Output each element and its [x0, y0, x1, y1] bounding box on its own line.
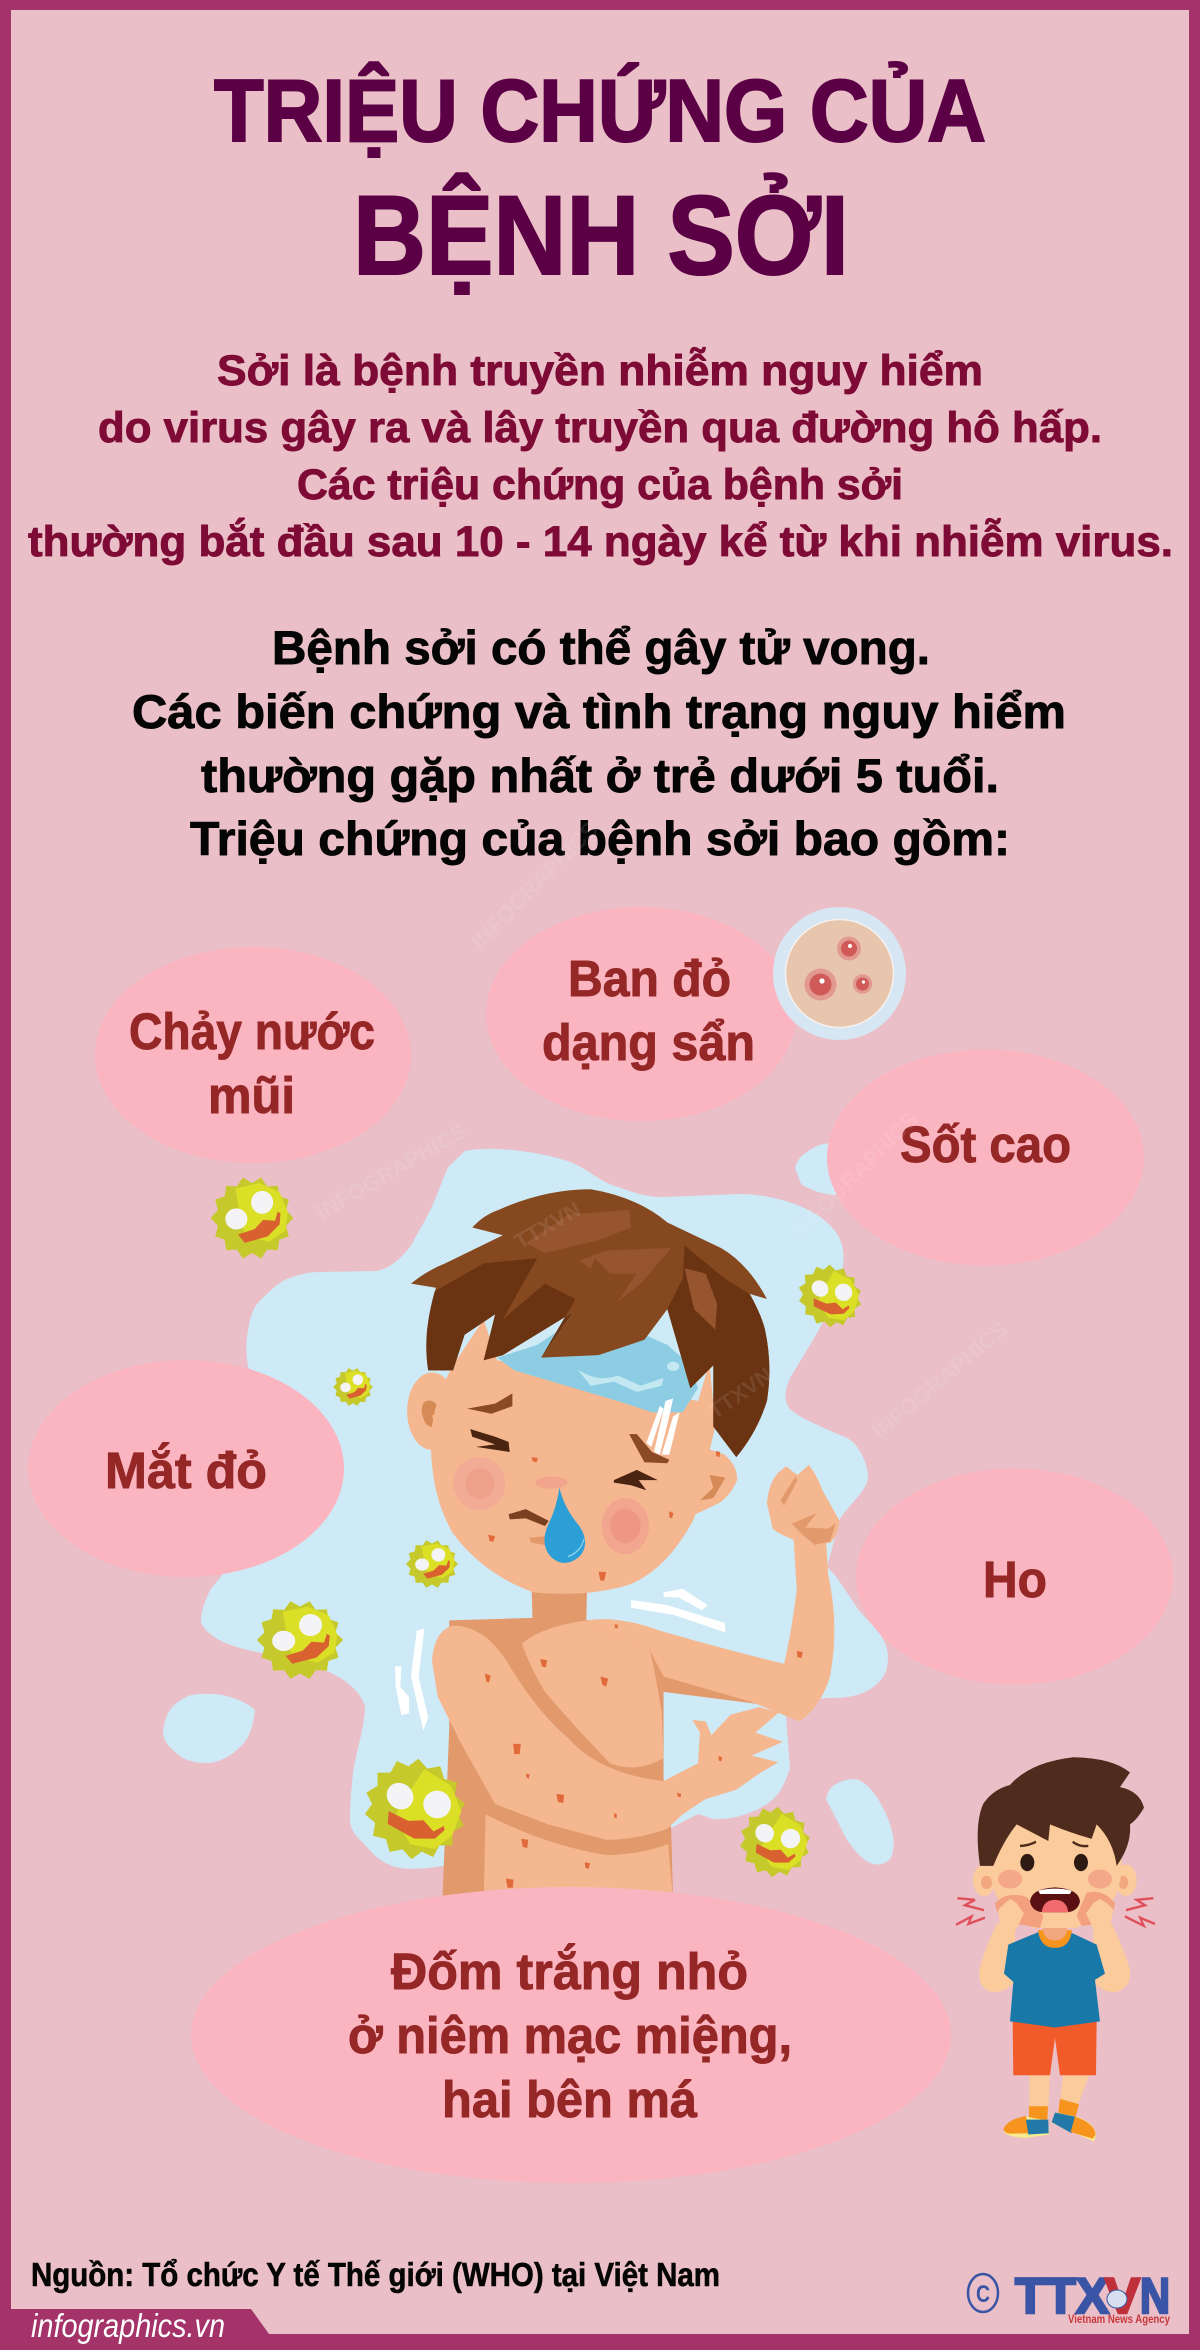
boy: cold compress	[497, 1319, 698, 1412]
boy: closed eyes	[470, 1429, 658, 1490]
bubble: Chảy nước mũi: mũi	[208, 1067, 295, 1124]
bubble: Sốt cao: Sốt cao	[900, 1116, 1071, 1173]
bubble: Mắt đỏ	[28, 1360, 344, 1577]
boy: runny nose drop	[544, 1488, 585, 1563]
small boy: face	[990, 1820, 1122, 1928]
boy: shaking lines	[395, 1589, 726, 1731]
bubble: Ho	[856, 1468, 1173, 1684]
website tag: infographics.vn	[31, 2307, 225, 2344]
small boy: collar	[1038, 1928, 1072, 1948]
small boy: shirt	[1004, 1932, 1105, 2028]
boy: mouth	[509, 1509, 549, 1545]
watermarks: INFOGRAPHICS	[466, 817, 603, 954]
small boy: shoes	[1003, 2113, 1096, 2142]
title: TRIỆU CHỨNG CỦA	[214, 61, 986, 160]
boy: neck	[532, 1585, 587, 1626]
bubble: Đốm trắng nhỏ: ở niêm mạc miệng,	[348, 2007, 792, 2064]
small boy: hair	[978, 1757, 1144, 1866]
logo: copyright mark: C	[976, 2281, 990, 2308]
logo: globe	[1107, 2290, 1127, 2308]
bubble: Ban đỏ dạng sẩn: Ban đỏ	[568, 950, 731, 1007]
small boy: ears	[973, 1865, 1137, 1896]
bubble: Chảy nước mũi: Chảy nước	[129, 1003, 375, 1060]
boy: flushed cheeks	[453, 1457, 649, 1554]
intro text: black: Bệnh sởi có thể gây tử vong.	[272, 621, 930, 674]
boy: hair	[411, 1189, 769, 1457]
bubble: Mắt đỏ: Mắt đỏ	[105, 1441, 267, 1499]
boy: left ear	[407, 1372, 457, 1450]
small boy: pain zigzags	[956, 1898, 1155, 1926]
boy: fist	[767, 1465, 840, 1545]
boy: raised arm	[587, 1539, 834, 1721]
watermarks: INFOGRAPHICS	[786, 1107, 923, 1244]
intro text: red: Sởi là bệnh truyền nhiễm nguy hiểm	[217, 346, 983, 395]
small boy: arms	[979, 1924, 1130, 1992]
logo: TTXVN	[968, 2268, 1170, 2326]
illustration: sick boy	[395, 1189, 840, 1901]
logo: wordmark	[1015, 2268, 1170, 2324]
bubble: Đốm trắng nhỏ: hai bên má	[442, 2071, 698, 2128]
watermarks: INFOGRAPHICS	[867, 1316, 1012, 1444]
small boy: hands	[998, 1899, 1113, 1945]
boy: torso	[442, 1618, 782, 1901]
small boy: swollen cheeks	[995, 1892, 1115, 1928]
intro text: black: thường gặp nhất ở trẻ dưới 5 tuổi.	[201, 749, 999, 802]
logo: wordmark: TTX	[1015, 2268, 1109, 2324]
boy: folded arm and hand	[432, 1626, 783, 1840]
small boy: eyes and brows	[1020, 1842, 1088, 1871]
intro text: red	[28, 346, 1173, 566]
bubble: Ban đỏ dạng sẩn: dạng sẩn	[542, 1014, 755, 1071]
boy: face	[431, 1319, 715, 1594]
boy: eyebrows	[467, 1393, 669, 1463]
logo: wordmark: V	[1105, 2268, 1141, 2324]
icon: skin rash magnifier	[773, 907, 906, 1040]
logo: copyright mark	[968, 2274, 998, 2312]
blue background blobs	[163, 1142, 894, 1869]
boy: sweat marks	[646, 1398, 680, 1455]
boy: right ear	[692, 1447, 737, 1516]
illustration: small boy with sore cheeks	[956, 1757, 1155, 2142]
small boy: cheeks blush	[998, 1870, 1112, 1889]
intro text: black: Các biến chứng và tình trạng nguy hiểm	[132, 685, 1066, 738]
source line: Nguồn: Tổ chức Y tế Thế giới (WHO) tại Việt Nam	[31, 2256, 720, 2293]
intro text: black	[132, 621, 1066, 865]
small boy: legs	[1029, 2073, 1090, 2108]
watermarks: TTXVN	[510, 1197, 585, 1254]
title: BỆNH SỞI	[353, 173, 849, 298]
boy: chest	[522, 1620, 664, 1767]
logo: tagline: Vietnam News Agency	[1068, 2312, 1170, 2326]
intro text: red: do virus gây ra và lây truyền qua đường hô hấp.	[98, 404, 1102, 452]
logo: wordmark: N	[1140, 2268, 1170, 2324]
small boy: open mouth	[1030, 1887, 1080, 1912]
bubble: Đốm trắng nhỏ: Đốm trắng nhỏ	[391, 1942, 748, 2000]
small boy: socks	[1029, 2099, 1079, 2120]
intro text: red: Các triệu chứng của bệnh sởi	[297, 461, 903, 509]
boy: lower belly	[484, 1814, 673, 1901]
intro text: red: thường bắt đầu sau 10 - 14 ngày kể từ khi nhiễm virus.	[28, 517, 1173, 566]
watermarks	[312, 817, 1012, 1444]
bubble: Chảy nước mũi	[95, 947, 411, 1163]
bubble: Sốt cao	[827, 1050, 1144, 1266]
small boy: shorts	[1013, 2021, 1097, 2075]
bubble: Ho: Ho	[983, 1551, 1047, 1608]
intro text: black: Triệu chứng của bệnh sởi bao gồm:	[190, 812, 1010, 865]
watermarks: INFOGRAPHICS	[312, 1118, 471, 1224]
boy: rash spots	[485, 1451, 803, 1888]
bubble: Ban đỏ dạng sẩn	[486, 907, 796, 1121]
virus icons	[211, 1178, 874, 1892]
watermarks: TTXVN	[704, 1362, 777, 1424]
boy: nose	[535, 1477, 568, 1489]
title	[214, 61, 986, 298]
bubble: Đốm trắng nhỏ	[191, 1887, 951, 2183]
